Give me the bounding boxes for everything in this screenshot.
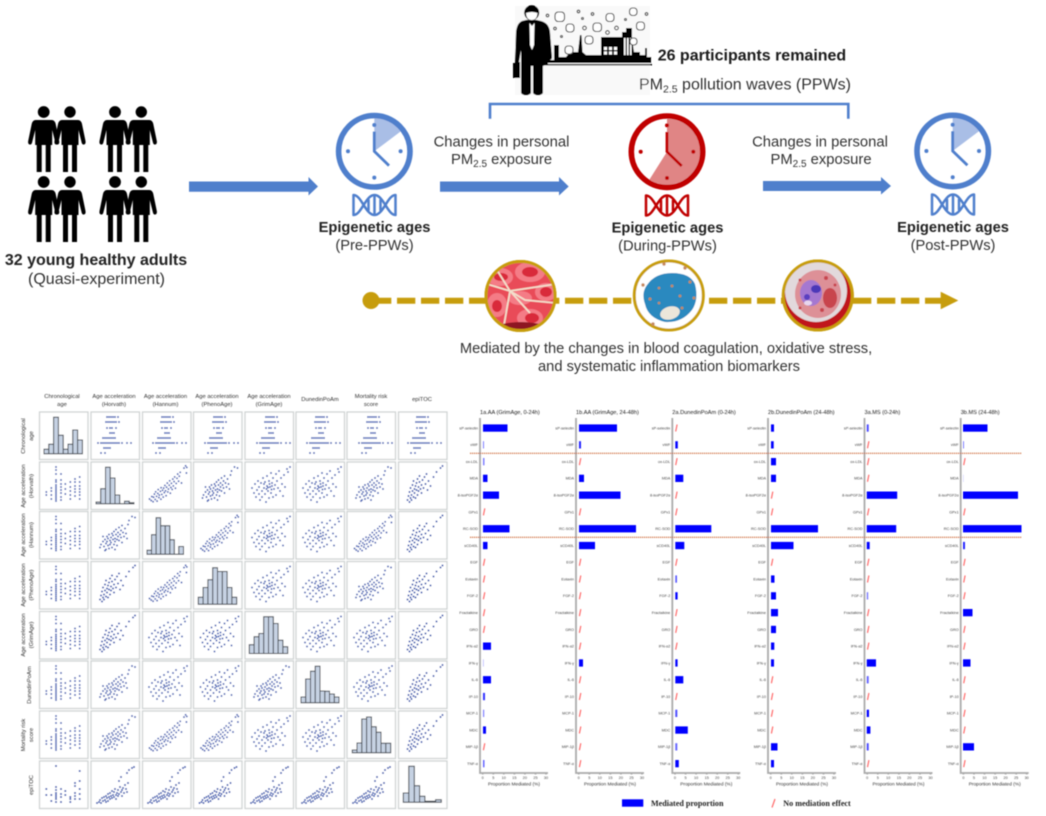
chart: mediation bars 1a AA GrimAge 0-24h — [458, 410, 548, 788]
chart: mediation bars 1b AA GrimAge 24-48h: RC-SOD — [559, 527, 574, 531]
chart: mediation bars 3b MS 24-48h: 25 — [1014, 776, 1018, 780]
chart: mediation bars 1b AA GrimAge 24-48h: IL-6 — [567, 678, 574, 682]
chart: mediation bars 3b MS 24-48h: IP-10 — [950, 695, 959, 699]
chart: mediation bars 3b MS 24-48h: Proportion Mediated (%) — [969, 782, 1021, 788]
chart: mediation bars 3b MS 24-48h: 20 — [1003, 776, 1008, 780]
chart: mediation bars 3b MS 24-48h: IL-6 — [952, 678, 959, 682]
bracket: PPW period — [490, 104, 848, 119]
matrix row headings: (Horvath) — [29, 474, 35, 498]
chart: mediation bars 2b DunedinPoAm 24-48h: 5 — [780, 776, 782, 780]
chart: mediation bars 2b DunedinPoAm 24-48h: ox-LDL — [754, 460, 766, 464]
chart: mediation bars 2b DunedinPoAm 24-48h: IP-10 — [757, 695, 766, 699]
chart: mediation bars 1b AA GrimAge 24-48h: IFN-α2 — [562, 644, 574, 648]
chart: mediation bars 2a DunedinPoAm 0-24h: Proportion Mediated (%) — [680, 782, 733, 788]
chart: mediation bars 3a MS 0-24h: 25 — [918, 776, 922, 780]
chart: mediation bars 1a AA GrimAge 0-24h: Eotaxin — [465, 577, 478, 581]
text: mediation caption: and systematic inflammation biomarkers — [538, 359, 800, 375]
matrix row headings — [21, 418, 35, 795]
text: mediation caption — [460, 341, 872, 375]
chart: mediation bars 2b DunedinPoAm 24-48h: Fractalkine — [747, 611, 766, 615]
chart: mediation bars 3a MS 0-24h: 20 — [907, 776, 912, 780]
diagonal histograms — [44, 417, 441, 802]
chart: mediation bars 1b AA GrimAge 24-48h: FGF-2 — [563, 594, 574, 598]
chart: mediation bars 3b MS 24-48h: vWF — [951, 443, 959, 447]
chart: mediation bars 2b DunedinPoAm 24-48h: RC-SOD — [751, 527, 766, 531]
chart: mediation bars 1a AA GrimAge 0-24h: 20 — [523, 776, 527, 780]
chart: mediation bars 3a MS 0-24h: MDC — [854, 728, 863, 732]
chart: mediation bars 1a AA GrimAge 0-24h: TNF-α — [467, 762, 479, 766]
chart: mediation bars 1a AA GrimAge 0-24h: 25 — [533, 776, 538, 780]
text: changes in personal exposure (second): exposure — [807, 152, 872, 168]
chart: mediation bars 1b AA GrimAge 24-48h: MDA — [566, 477, 574, 481]
icon: blue clock pre-PPWs — [339, 116, 410, 187]
chart: mediation bars 3a MS 0-24h: sCD40L — [849, 544, 862, 548]
matrix column headings: (Horvath) — [102, 402, 126, 408]
text: PM2.5 pollution waves: pollution waves (PPWs) — [678, 76, 851, 94]
chart: mediation bars 3b MS 24-48h: FGF-2 — [948, 594, 959, 598]
chart: mediation bars 2b DunedinPoAm 24-48h — [746, 410, 836, 788]
chart: mediation bars 2b DunedinPoAm 24-48h: IFN-α2 — [754, 644, 766, 648]
arrow: pre-PPWs to during-PPWs — [440, 177, 569, 196]
chart: mediation bars 2b DunedinPoAm 24-48h: 25 — [821, 776, 826, 780]
chart: mediation bars 1b AA GrimAge 24-48h: GRO — [565, 628, 574, 632]
text: during-PPWs epigenetic ages: Epigenetic ages — [612, 220, 723, 236]
matrix column headings: Chronological — [44, 394, 80, 400]
chart: mediation bars 1b AA GrimAge 24-48h: 25 — [629, 776, 634, 780]
chart: mediation bars 2a DunedinPoAm 0-24h: Fractalkine — [652, 611, 670, 615]
chart: mediation bars 2b DunedinPoAm 24-48h: Proportion Mediated (%) — [776, 782, 828, 788]
chart: mediation bars 1a AA GrimAge 0-24h: 8-isoPGF2α — [458, 494, 479, 498]
icon: group of 32 young healthy adults — [28, 106, 157, 242]
chart: mediation bars 3a MS 0-24h: IFN-α2 — [851, 644, 862, 648]
icon: red clock during-PPWs — [631, 116, 703, 187]
text: PM2.5 pollution waves: PM — [639, 76, 663, 94]
chart: mediation bars 3a MS 0-24h: Eotaxin — [850, 577, 862, 581]
chart: mediation bars 3a MS 0-24h: 8-isoPGF2α — [842, 494, 863, 498]
legend: mediated proportion: Mediated proportion — [651, 799, 724, 808]
chart: mediation bars 2a DunedinPoAm 0-24h: 10 — [694, 776, 698, 780]
matrix column headings: Age acceleration — [247, 394, 291, 400]
chart: mediation bars 1b AA GrimAge 24-48h: EGF — [566, 561, 575, 565]
chart: mediation bars 3a MS 0-24h: IP-10 — [853, 695, 862, 699]
text: changes in personal exposure (first): exposure — [487, 152, 552, 168]
chart: mediation bars 1b AA GrimAge 24-48h: 10 — [598, 776, 602, 780]
icon: blue DNA pre-PPWs — [354, 195, 396, 215]
chart: mediation bars 1b AA GrimAge 24-48h: Proportion Mediated (%) — [584, 782, 636, 788]
chart: mediation bars 2a DunedinPoAm 0-24h: 2a.DunedinPoAm (0-24h) — [672, 410, 736, 416]
chart: mediation bars 2a DunedinPoAm 0-24h: TNF-α — [659, 762, 671, 766]
chart: mediation bars 2b DunedinPoAm 24-48h: vWF — [758, 443, 767, 447]
chart: mediation bars 3b MS 24-48h: Fractalkine — [940, 611, 959, 615]
chart: mediation bars 3b MS 24-48h: MCP-1 — [947, 712, 959, 716]
chart: mediation bars 3b MS 24-48h: TNF-α — [948, 762, 960, 766]
chart: mediation bars 3a MS 0-24h: IL-6 — [856, 678, 862, 682]
chart: mediation bars 1b AA GrimAge 24-48h: 1b.AA (GrimAge, 24-48h) — [576, 410, 639, 416]
text: changes in personal exposure (first): PM — [451, 152, 473, 168]
text: PM2.5 pollution waves: 2.5 — [663, 84, 678, 96]
matrix column headings: score — [364, 402, 378, 408]
chart: mediation bars 1b AA GrimAge 24-48h: sCD40L — [560, 544, 574, 548]
matrix row headings: Age acceleration — [21, 464, 27, 508]
chart: mediation bars 2a DunedinPoAm 0-24h: sCD40L — [657, 544, 670, 548]
chart: mediation bars 2b DunedinPoAm 24-48h: TNF-α — [755, 762, 767, 766]
chart: mediation bars 3b MS 24-48h: GRO — [950, 628, 959, 632]
matrix row headings: Age acceleration — [21, 613, 27, 657]
chart: mediation bars 2a DunedinPoAm 0-24h: Eotaxin — [658, 577, 670, 581]
matrix row headings: DunedinPoAm — [27, 666, 33, 704]
chart: mediation bars 2a DunedinPoAm 0-24h: vWF — [662, 443, 671, 447]
chart: mediation bars 2b DunedinPoAm 24-48h: IFN-γ — [757, 661, 766, 665]
chart: mediation bars 3a MS 0-24h: 5 — [877, 776, 879, 780]
chart: mediation bars 3a MS 0-24h: 3a.MS (0-24h) — [864, 410, 900, 416]
top row strip plots — [98, 417, 441, 453]
chart: mediation bars 3b MS 24-48h: MIP-1β — [946, 745, 960, 749]
chart: mediation bars 1b AA GrimAge 24-48h — [554, 410, 644, 788]
matrix column headings: age — [57, 402, 67, 408]
text: study population: (Quasi-experiment) — [28, 271, 165, 288]
chart: mediation bars 1b AA GrimAge 24-48h: TNF-α — [563, 762, 575, 766]
text: changes in personal exposure (second) — [752, 134, 888, 170]
chart: mediation bars 3a MS 0-24h — [842, 410, 933, 788]
chart: mediation bars 2b DunedinPoAm 24-48h: GPx1 — [756, 510, 766, 514]
chart: mediation bars 2a DunedinPoAm 0-24h: IFN-γ — [661, 661, 670, 665]
matrix row headings: Chronological — [21, 418, 27, 454]
chart: mediation bars 3b MS 24-48h: Eotaxin — [946, 577, 959, 581]
scatter plots — [97, 466, 443, 803]
chart: mediation bars 1a AA GrimAge 0-24h: ox-LDL — [466, 460, 478, 464]
chart: mediation bars 2b DunedinPoAm 24-48h: 20 — [811, 776, 815, 780]
chart: mediation bars 3b MS 24-48h: 30 — [1025, 776, 1029, 780]
chart: mediation bars 1b AA GrimAge 24-48h: MIP-1β — [562, 745, 575, 749]
matrix row headings: (PhenoAge) — [29, 569, 35, 600]
chart: mediation bars 1a AA GrimAge 0-24h: Proportion Mediated (%) — [488, 782, 540, 788]
matrix column headings: Age acceleration — [92, 394, 136, 400]
chart: mediation bars 3a MS 0-24h: RC-SOD — [848, 527, 863, 531]
chart: mediation bars 1a AA GrimAge 0-24h: Fractalkine — [459, 611, 478, 615]
chart: mediation bars 1a AA GrimAge 0-24h: 0 — [482, 776, 484, 780]
chart: mediation bars 3b MS 24-48h: MDA — [950, 477, 959, 481]
chart: mediation bars 2a DunedinPoAm 0-24h: GRO — [662, 628, 670, 632]
chart: mediation bars 2b DunedinPoAm 24-48h: 30 — [832, 776, 836, 780]
arrow: during-PPWs to post-PPWs — [763, 177, 891, 194]
matrix row headings: Age acceleration — [21, 513, 27, 557]
chart: mediation bars 1b AA GrimAge 24-48h: Eotaxin — [561, 577, 574, 581]
chart: mediation bars 1a AA GrimAge 0-24h: 15 — [512, 776, 517, 780]
chart: mediation bars 3a MS 0-24h: GPx1 — [853, 510, 862, 514]
chart: mediation bars 1b AA GrimAge 24-48h: MDC — [565, 728, 574, 732]
chart: mediation bars 3a MS 0-24h: Proportion Mediated (%) — [872, 782, 925, 788]
chart: mediation bars 2b DunedinPoAm 24-48h: EGF — [758, 561, 767, 565]
chart: mediation bars 3b MS 24-48h: MDC — [950, 728, 959, 732]
icon: blue clock post-PPWs — [917, 115, 988, 187]
chart: mediation bars 2a DunedinPoAm 0-24h: IP-10 — [661, 695, 670, 699]
chart: mediation bars 3b MS 24-48h: 8-isoPGF2α — [938, 494, 960, 498]
chart: mediation bars 3b MS 24-48h: RC-SOD — [944, 527, 959, 531]
chart: mediation bars 2a DunedinPoAm 0-24h: 30 — [736, 776, 740, 780]
chart: mediation bars 3b MS 24-48h: IFN-α2 — [947, 644, 959, 648]
chart: mediation bars 1b AA GrimAge 24-48h: ox-LDL — [562, 460, 574, 464]
chart: mediation bars 1a AA GrimAge 0-24h: MDA — [470, 477, 478, 481]
left column strip plots — [46, 467, 80, 802]
chart: mediation bars 1a AA GrimAge 0-24h: 10 — [502, 776, 506, 780]
chart: mediation bars 2b DunedinPoAm 24-48h: GRO — [757, 628, 766, 632]
matrix column headings: Mortality risk — [355, 394, 387, 400]
chart: mediation bars 3a MS 0-24h: ox-LDL — [850, 460, 862, 464]
matrix column headings — [44, 394, 432, 408]
chart: mediation bars 1b AA GrimAge 24-48h: 20 — [619, 776, 623, 780]
chart: mediation bars 1a AA GrimAge 0-24h: sP-selectin — [459, 426, 478, 430]
chart: mediation bars 1a AA GrimAge 0-24h: vWF — [470, 443, 479, 447]
chart: mediation bars 1b AA GrimAge 24-48h: 30 — [640, 776, 644, 780]
chart: mediation bars 3b MS 24-48h: 5 — [973, 776, 975, 780]
matrix row headings: (Hannum) — [29, 522, 35, 548]
chart: mediation bars 1a AA GrimAge 0-24h: IFN-γ — [469, 661, 478, 665]
text: changes in personal exposure (second): PM — [770, 152, 793, 168]
matrix column headings: (PhenoAge) — [202, 402, 233, 408]
chart: mediation bars 2b DunedinPoAm 24-48h: 8-isoPGF2α — [746, 494, 767, 498]
chart: mediation bars 2a DunedinPoAm 0-24h: MIP-1β — [658, 745, 671, 749]
chart: mediation bars 1b AA GrimAge 24-48h: MCP-1 — [562, 712, 574, 716]
chart: mediation bars 2a DunedinPoAm 0-24h: 8-isoPGF2α — [650, 494, 671, 498]
chart: mediation bars 1b AA GrimAge 24-48h: GPx1 — [564, 510, 574, 514]
chart: mediation bars 2b DunedinPoAm 24-48h: 2b.DunedinPoAm (24-48h) — [768, 410, 835, 416]
text: during-PPWs epigenetic ages — [612, 220, 723, 254]
text: pre-PPWs epigenetic ages — [319, 220, 430, 254]
matrix row headings: age — [29, 431, 35, 441]
chart: mediation bars 2a DunedinPoAm 0-24h: IL-6 — [664, 678, 670, 682]
icon: oxidative stress cell image — [634, 261, 703, 330]
chart: mediation bars 1b AA GrimAge 24-48h: IFN-γ — [565, 661, 574, 665]
text: post-PPWs epigenetic ages: Epigenetic ages — [897, 220, 1009, 236]
chart: mediation bars 2a DunedinPoAm 0-24h: 20 — [715, 776, 719, 780]
chart: mediation bars 2a DunedinPoAm 0-24h: EGF — [662, 561, 671, 565]
text: post-PPWs epigenetic ages: (Post-PPWs) — [911, 238, 995, 254]
chart: mediation bars 1b AA GrimAge 24-48h: vWF — [566, 443, 575, 447]
chart: mediation bars 3b MS 24-48h: IFN-γ — [949, 661, 959, 665]
chart: mediation bars 1a AA GrimAge 0-24h: GRO — [469, 628, 478, 632]
arrow: gold dashed mediation timeline — [362, 292, 958, 309]
text: pre-PPWs epigenetic ages: Epigenetic ages — [319, 220, 430, 236]
text: study population — [5, 252, 187, 288]
chart: correlation matrix of epigenetic ages — [21, 394, 447, 808]
chart: mediation bars 1a AA GrimAge 0-24h: IP-10 — [469, 695, 478, 699]
text: pre-PPWs epigenetic ages: (Pre-PPWs) — [335, 238, 414, 254]
chart: mediation bars 3a MS 0-24h: 10 — [886, 776, 890, 780]
chart: mediation bars 3a MS 0-24h: GRO — [854, 628, 863, 632]
chart: mediation bars 3a MS 0-24h: IFN-γ — [853, 661, 863, 665]
text: changes in personal exposure (second): Changes in personal — [752, 134, 888, 150]
chart: mediation bars 2b DunedinPoAm 24-48h: MCP-1 — [754, 712, 766, 716]
text: changes in personal exposure (second): 2.5 — [793, 159, 807, 170]
chart: mediation bars 3a MS 0-24h: FGF-2 — [852, 594, 862, 598]
icon: blood coagulation image — [484, 260, 557, 334]
chart: mediation bars 2a DunedinPoAm 0-24h: MDC — [662, 728, 671, 732]
chart: mediation bars 1a AA GrimAge 0-24h: EGF — [470, 561, 479, 565]
chart: mediation bars 1a AA GrimAge 0-24h: IFN-α2 — [466, 644, 478, 648]
chart: mediation bars 1a AA GrimAge 0-24h: FGF-2 — [467, 594, 478, 598]
chart: mediation bars 3a MS 0-24h: Fractalkine — [844, 611, 862, 615]
matrix column headings: (Hannum) — [153, 402, 178, 408]
chart: mediation bars 2b DunedinPoAm 24-48h: MDC — [757, 728, 766, 732]
chart: mediation bars 1a AA GrimAge 0-24h: IL-6 — [471, 678, 478, 682]
chart: mediation bars 1b AA GrimAge 24-48h: 8-isoPGF2α — [554, 494, 575, 498]
chart: mediation bars 3b MS 24-48h: sP-selectin — [940, 426, 959, 430]
chart: mediation bars 2b DunedinPoAm 24-48h: 15 — [800, 776, 805, 780]
chart: mediation bars 3b MS 24-48h: 15 — [993, 776, 997, 780]
chart: mediation bars 3b MS 24-48h: ox-LDL — [946, 460, 959, 464]
chart: mediation bars 3a MS 0-24h: 0 — [866, 776, 868, 780]
chart: mediation bars 1b AA GrimAge 24-48h: sP-selectin — [555, 426, 574, 430]
chart: mediation bars 2a DunedinPoAm 0-24h: MDA — [662, 477, 671, 481]
chart: mediation bars 1a AA GrimAge 0-24h: 30 — [544, 776, 548, 780]
text: changes in personal exposure (first): Changes in personal — [434, 134, 569, 150]
chart: mediation bars 2a DunedinPoAm 0-24h: MCP-1 — [658, 712, 670, 716]
chart: mediation bars 2a DunedinPoAm 0-24h: 5 — [685, 776, 687, 780]
matrix panel frames — [40, 412, 447, 808]
chart: mediation bars 1b AA GrimAge 24-48h: 15 — [608, 776, 613, 780]
chart: mediation bars 3a MS 0-24h: MDA — [854, 477, 863, 481]
chart: mediation bars 3b MS 24-48h — [938, 410, 1029, 788]
chart: mediation bars 3a MS 0-24h: MIP-1β — [850, 745, 863, 749]
chart: mediation bars 1b AA GrimAge 24-48h: Fractalkine — [555, 611, 574, 615]
chart: mediation bars 1a AA GrimAge 0-24h: GPx1 — [468, 510, 478, 514]
chart: mediation bars 1a AA GrimAge 0-24h: MDC — [469, 728, 478, 732]
legend: no mediation effect: No mediation effect — [783, 799, 851, 808]
icon: red DNA during-PPWs — [646, 196, 688, 216]
matrix row headings: (GrimAge) — [29, 622, 35, 648]
text: changes in personal exposure (first): 2.5 — [473, 159, 487, 170]
text: study population: 32 young healthy adults — [5, 252, 187, 269]
matrix row headings: score — [29, 728, 35, 742]
chart: mediation bars 2a DunedinPoAm 0-24h: GPx1 — [661, 510, 670, 514]
chart: mediation bars 1b AA GrimAge 24-48h: 0 — [578, 776, 580, 780]
chart: mediation bars 3a MS 0-24h: sP-selectin — [844, 426, 862, 430]
chart: mediation bars 2b DunedinPoAm 24-48h: Eotaxin — [753, 577, 766, 581]
text: post-PPWs epigenetic ages — [897, 220, 1009, 254]
chart: mediation bars 1b AA GrimAge 24-48h: 5 — [588, 776, 590, 780]
chart: mediation bars 1a AA GrimAge 0-24h: MIP-1β — [466, 745, 479, 749]
chart: mediation bars 2b DunedinPoAm 24-48h: MDA — [758, 477, 766, 481]
chart: mediation bars 2b DunedinPoAm 24-48h: FGF-2 — [755, 594, 766, 598]
matrix row headings: Mortality risk — [21, 719, 27, 751]
icon: businessman with mask and polluted city — [513, 5, 652, 95]
matrix column headings: (GrimAge) — [256, 402, 282, 408]
chart: mediation bars 2a DunedinPoAm 0-24h: 15 — [705, 776, 709, 780]
chart: mediation bars 3b MS 24-48h: EGF — [951, 561, 959, 565]
chart: mediation bars 3b MS 24-48h: 3b.MS (24-48h) — [961, 410, 1000, 416]
chart: mediation bars 3b MS 24-48h: GPx1 — [949, 510, 959, 514]
chart: mediation bars 2a DunedinPoAm 0-24h: 0 — [674, 776, 676, 780]
chart: mediation bars 3a MS 0-24h: MCP-1 — [851, 712, 862, 716]
chart: mediation bars 2b DunedinPoAm 24-48h: MIP-1β — [754, 745, 767, 749]
chart: mediation bars 2a DunedinPoAm 0-24h: FGF-2 — [659, 594, 670, 598]
chart: mediation bars 3a MS 0-24h: EGF — [855, 561, 863, 565]
matrix column headings: DunedinPoAm — [301, 397, 339, 403]
chart: mediation bars 2a DunedinPoAm 0-24h: sP-selectin — [652, 426, 670, 430]
chart: mediation bars 3a MS 0-24h: 30 — [928, 776, 933, 780]
matrix column headings: Age acceleration — [144, 394, 187, 400]
chart: mediation bars 3b MS 24-48h: sCD40L — [945, 544, 959, 548]
arrow: adults to pre-PPWs — [189, 177, 318, 196]
chart: mediation bars 1a AA GrimAge 0-24h: MCP-1 — [466, 712, 478, 716]
icon: blue DNA post-PPWs — [932, 194, 974, 214]
chart: mediation bars 3a MS 0-24h: TNF-α — [852, 762, 863, 766]
chart: mediation bars 2b DunedinPoAm 24-48h: 10 — [790, 776, 794, 780]
chart: mediation bars 2a DunedinPoAm 0-24h: IFN-α2 — [659, 644, 670, 648]
chart: mediation bars 3a MS 0-24h: vWF — [855, 443, 863, 447]
chart: mediation bars 2a DunedinPoAm 0-24h: ox-LDL — [658, 460, 670, 464]
matrix row headings: Age acceleration — [21, 563, 27, 607]
chart: mediation bars 2a DunedinPoAm 0-24h: 25 — [726, 776, 730, 780]
text: 26 participants remained: 26 participants remained — [658, 48, 846, 64]
chart: mediation bars 2a DunedinPoAm 0-24h: RC-SOD — [655, 527, 671, 531]
text: during-PPWs epigenetic ages: (During-PPWs) — [618, 238, 717, 254]
text: mediation caption: Mediated by the changes in blood coagulation, oxidative stress, — [460, 341, 872, 357]
matrix row headings: epiTOC — [29, 775, 35, 795]
chart: mediation bars 3b MS 24-48h: 0 — [962, 776, 964, 780]
matrix column headings: Age acceleration — [195, 394, 239, 400]
chart: mediation bars 2b DunedinPoAm 24-48h: sCD40L — [752, 544, 766, 548]
chart: mediation bars 2b DunedinPoAm 24-48h: 0 — [770, 776, 772, 780]
chart: mediation bars 1a AA GrimAge 0-24h: 5 — [492, 776, 494, 780]
chart: mediation bars 1b AA GrimAge 24-48h: IP-10 — [565, 695, 574, 699]
icon: systemic inflammation cell image — [782, 260, 854, 332]
chart: mediation bars 2b DunedinPoAm 24-48h: sP-selectin — [747, 426, 766, 430]
chart: mediation bars 3a MS 0-24h: 15 — [897, 776, 901, 780]
text: changes in personal exposure (first) — [434, 134, 569, 170]
chart: mediation bars 2b DunedinPoAm 24-48h: IL-6 — [759, 678, 766, 682]
chart: mediation bars 2a DunedinPoAm 0-24h — [650, 410, 740, 788]
chart: mediation bars 3b MS 24-48h: 10 — [982, 776, 987, 780]
chart: mediation bars 1a AA GrimAge 0-24h: RC-SOD — [463, 527, 478, 531]
matrix column headings: epiTOC — [412, 397, 432, 403]
chart: mediation bars 1a AA GrimAge 0-24h: sCD40L — [464, 544, 478, 548]
chart: mediation bars 1a AA GrimAge 0-24h: 1a.AA (GrimAge, 0-24h) — [480, 410, 540, 416]
